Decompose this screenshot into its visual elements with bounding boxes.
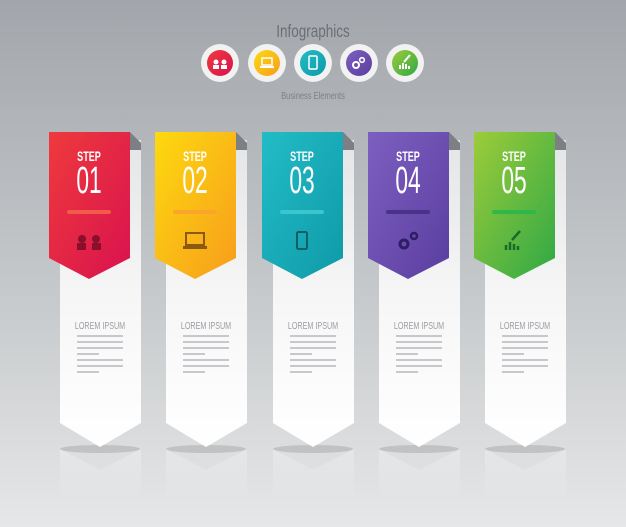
step column 5: STEP — [502, 148, 526, 165]
step column 1 — [49, 132, 141, 500]
step column 2: STEP — [183, 148, 207, 165]
step column 4: STEP — [396, 148, 420, 165]
step column 5: 05 — [501, 159, 527, 201]
icon circle: phone — [294, 44, 332, 82]
step column 1: STEP — [77, 148, 101, 165]
icon circle: gears — [340, 44, 378, 82]
icon circle: people — [201, 44, 239, 82]
icon circle: chart — [386, 44, 424, 82]
step column 4: LOREM IPSUM — [394, 320, 444, 331]
step column 4: 04 — [395, 159, 421, 201]
icon circle: computer — [248, 44, 286, 82]
subtitle: Business Elements — [281, 90, 345, 101]
step column 1: 01 — [76, 159, 102, 201]
step column 5: LOREM IPSUM — [500, 320, 550, 331]
step column 2: LOREM IPSUM — [181, 320, 231, 331]
step column 3: STEP — [290, 148, 314, 165]
title: Infographics — [276, 22, 350, 42]
step column 5 — [474, 132, 566, 500]
step column 3: LOREM IPSUM — [288, 320, 338, 331]
step column 2 — [155, 132, 247, 500]
step column 2: 02 — [182, 159, 208, 201]
step column 3: 03 — [289, 159, 315, 201]
step column 3 — [262, 132, 354, 500]
step column 1: LOREM IPSUM — [75, 320, 125, 331]
top icon row — [201, 44, 424, 82]
step column 4 — [368, 132, 460, 500]
